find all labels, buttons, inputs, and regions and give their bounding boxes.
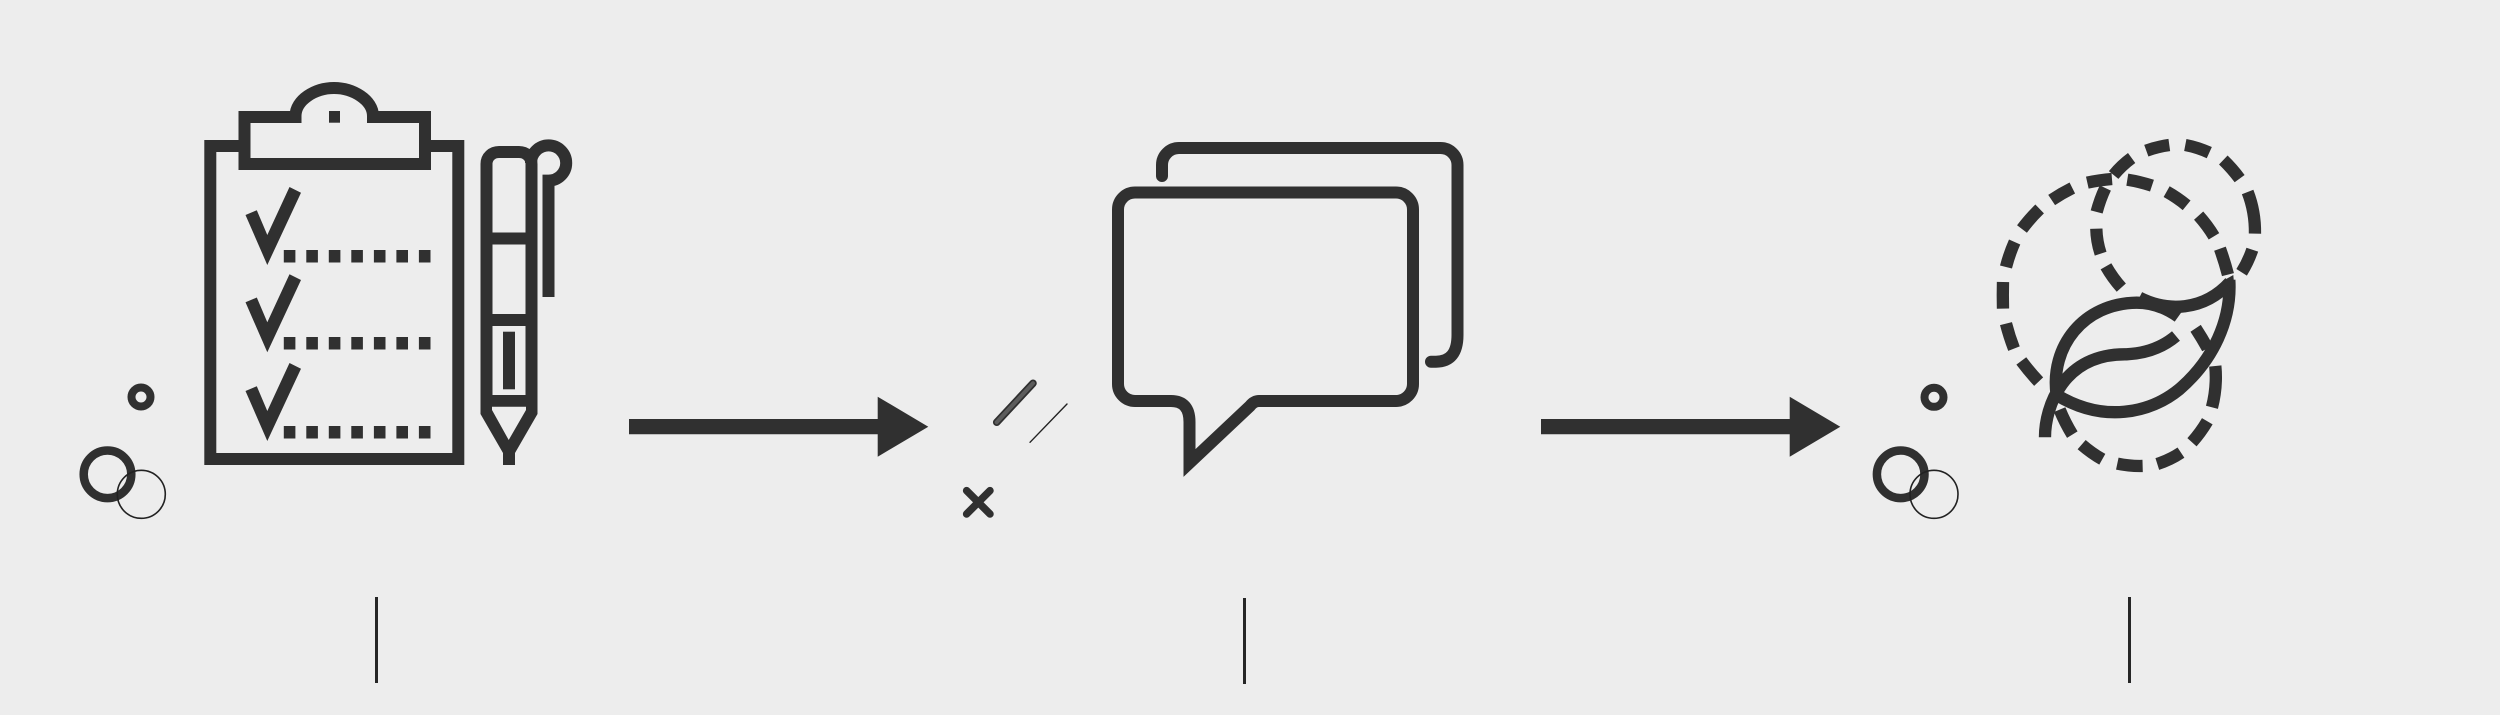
- leaf top edge: [2139, 282, 2230, 307]
- clipboard board: [210, 146, 458, 459]
- pen nib: [480, 395, 538, 465]
- dashed orbit: [2003, 145, 2255, 466]
- checklist row 2: [246, 274, 430, 352]
- decoration: circles left: [84, 388, 165, 518]
- pen inner bar: [503, 332, 515, 389]
- pen barrel: [486, 152, 532, 400]
- icon: leaf with dashed orbit: [2003, 145, 2255, 466]
- divider tick 2: [1243, 598, 1246, 684]
- icon: pen: [480, 145, 566, 465]
- clipboard clip: [244, 88, 425, 164]
- front bubble: [1118, 192, 1413, 463]
- pen bands: [486, 238, 532, 320]
- clip hole: [329, 111, 340, 123]
- decoration: circles right: [1877, 388, 1958, 518]
- pen clip: [531, 145, 566, 297]
- decoration: strokes and cross: [967, 383, 1067, 514]
- divider tick 3: [2128, 597, 2131, 683]
- arrow 2: [1541, 397, 1840, 457]
- icon: speech bubbles: [1118, 148, 1458, 463]
- leaf outline: [2056, 280, 2229, 412]
- back bubble: [1162, 148, 1458, 362]
- leaf tip: [2223, 275, 2235, 293]
- checklist row 3: [246, 363, 430, 441]
- leaf stem: [2045, 336, 2176, 437]
- divider tick 1: [375, 597, 378, 683]
- arrow 1: [629, 397, 928, 457]
- checklist row 1: [246, 187, 430, 265]
- icon: clipboard with checklist: [210, 88, 458, 459]
